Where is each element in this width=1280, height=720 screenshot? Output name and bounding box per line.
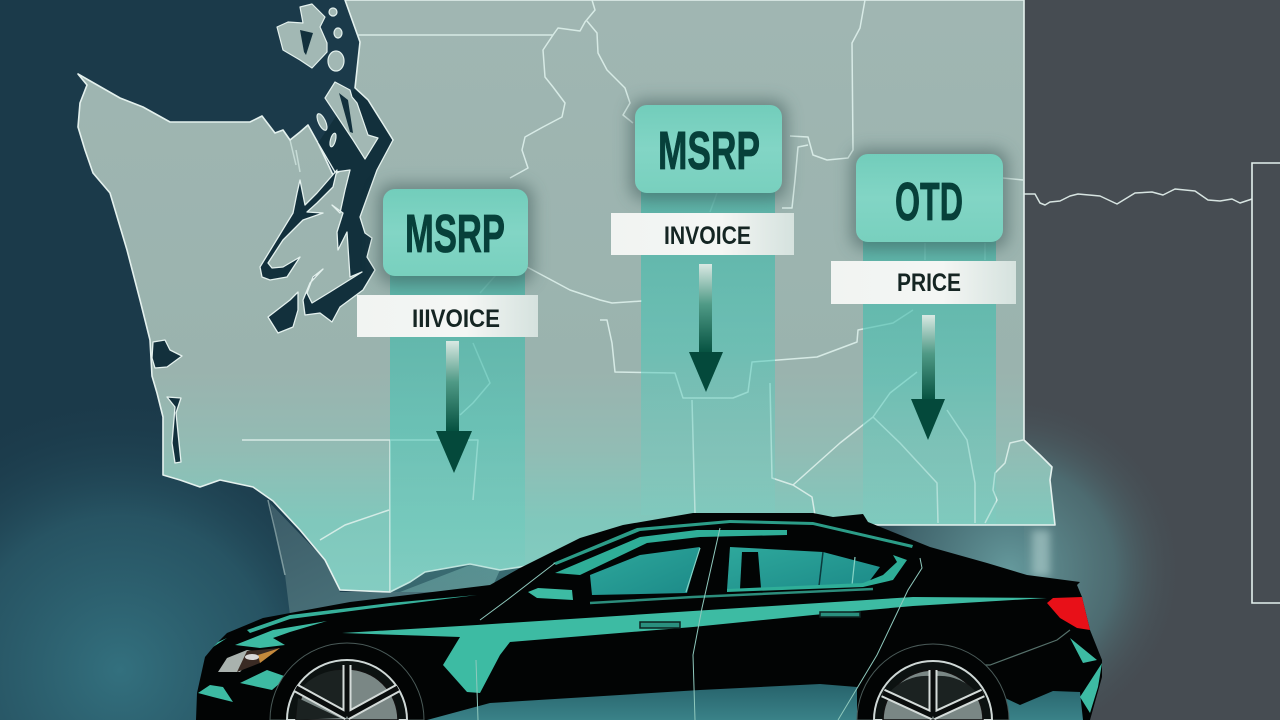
MSRP card	[383, 189, 528, 276]
rear window	[727, 547, 880, 590]
OTD card	[856, 154, 1003, 242]
price label	[831, 261, 1016, 304]
MSRP card: MSRP	[405, 204, 505, 264]
car body	[196, 513, 1102, 720]
card shadow	[851, 149, 1008, 249]
rear window pillar shadow and lines	[740, 552, 761, 589]
side swoosh	[342, 597, 1047, 693]
rear wheel	[857, 644, 1009, 720]
belt line	[590, 589, 873, 603]
card shadow	[378, 184, 533, 284]
invoice label: IIIVOICE	[412, 305, 500, 333]
door handles	[640, 612, 860, 628]
window frame band	[555, 530, 787, 575]
tail light	[1047, 597, 1090, 630]
column 3: OTD price	[831, 149, 1016, 524]
invoice label: INVOICE	[664, 222, 751, 250]
inner dark inlets	[300, 30, 353, 133]
side mirror	[528, 588, 573, 600]
islands	[277, 4, 378, 159]
front wheel teal arch	[391, 672, 415, 718]
column band	[641, 185, 775, 515]
fender highlight	[235, 621, 327, 648]
rear character line	[977, 630, 1070, 665]
front wheel	[270, 643, 424, 720]
roof stripe	[553, 520, 913, 565]
neighbouring state boundary box	[1252, 163, 1280, 603]
MSRP card	[635, 105, 782, 193]
rear window frame	[727, 555, 907, 592]
bumper accent	[198, 638, 287, 702]
column band	[390, 270, 525, 592]
rear teal accents	[1070, 638, 1102, 713]
card shadow	[630, 100, 787, 200]
price label: PRICE	[897, 269, 961, 297]
Puget Sound water	[152, 88, 393, 463]
invoice label	[357, 295, 538, 337]
MSRP card: MSRP	[658, 121, 760, 181]
hood stripe	[247, 595, 477, 633]
down arrow	[436, 341, 472, 473]
Washington state map	[78, 0, 1280, 603]
column band	[863, 235, 996, 524]
land shape	[78, 0, 1055, 592]
sedan car	[196, 513, 1102, 720]
headlight	[218, 648, 280, 672]
column 1: MSRP to invoice	[357, 184, 538, 592]
down arrow	[911, 315, 945, 440]
inland boundary lines	[242, 0, 1252, 592]
invoice label	[611, 213, 794, 255]
under-car glow	[420, 670, 1090, 720]
front window	[590, 547, 700, 595]
column 2: MSRP to invoice	[611, 100, 794, 515]
down arrow	[689, 264, 723, 392]
OTD card: OTD	[895, 172, 963, 232]
door seams	[476, 528, 922, 720]
